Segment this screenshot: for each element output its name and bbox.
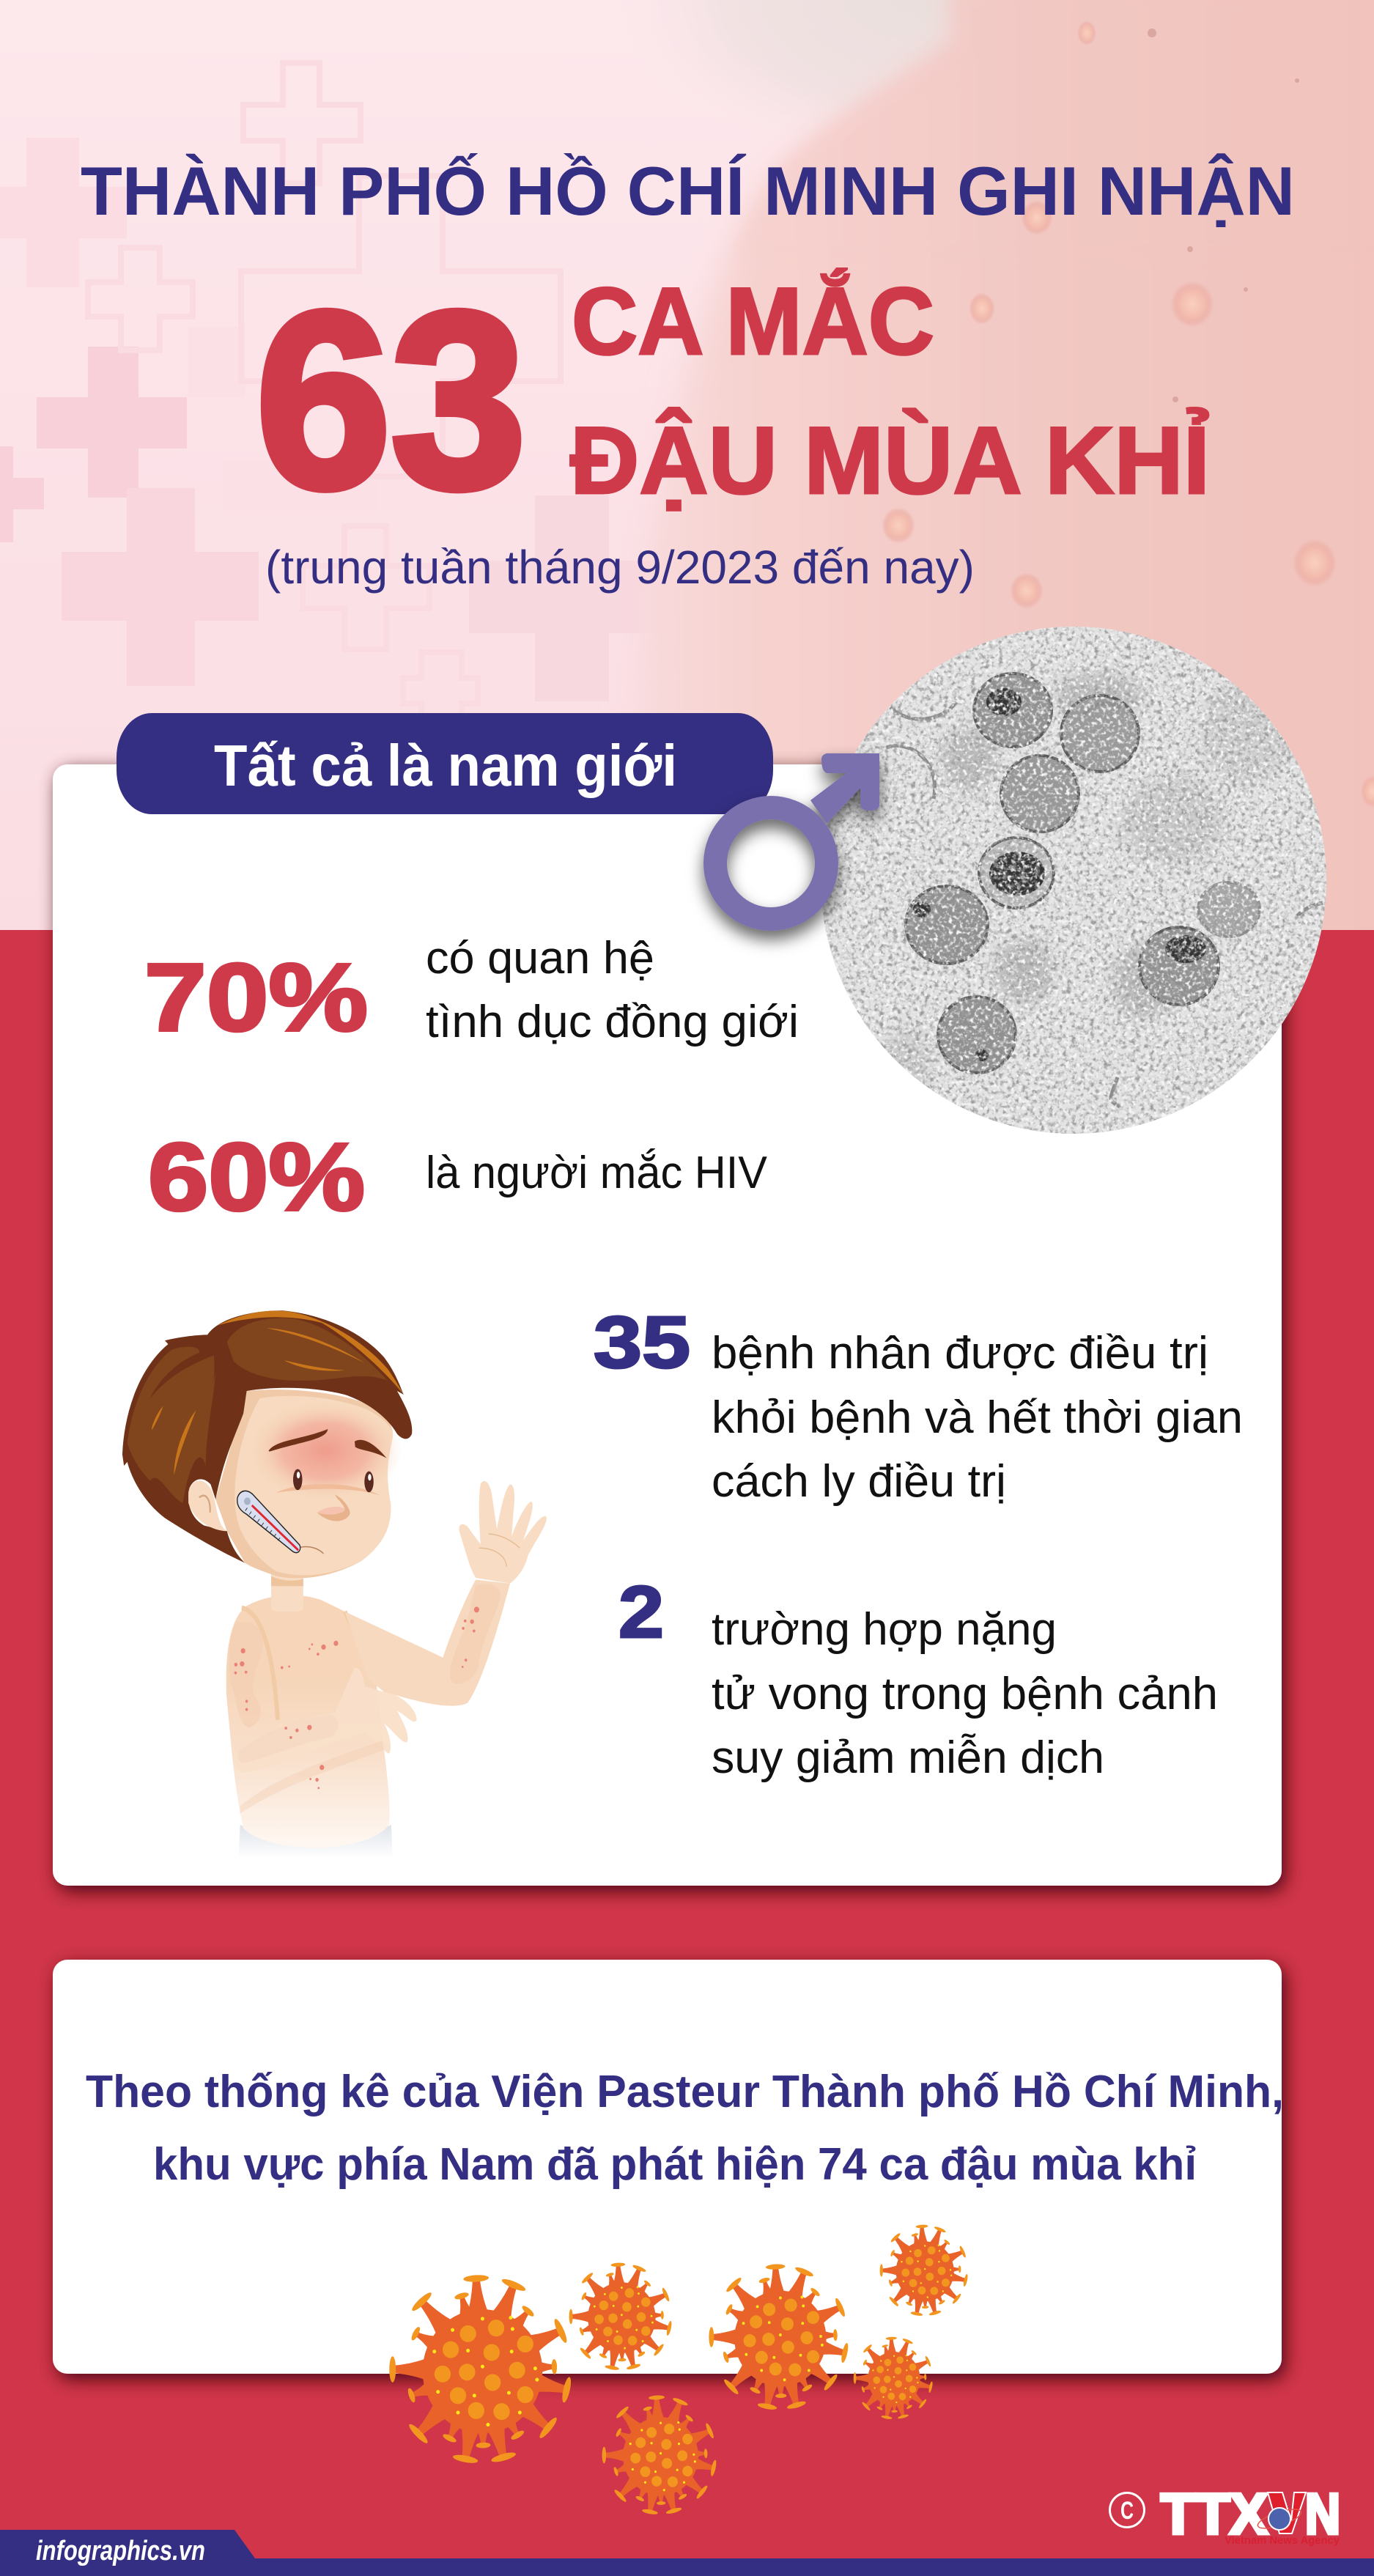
stat: 2 severe deaths: tử vong trong bệnh cảnh: [712, 1669, 1218, 1719]
logo: TTXVN copyright: [1109, 2481, 1340, 2547]
panel: main statistics: [53, 764, 1285, 1892]
stat: 2 severe deaths: [618, 1571, 1218, 1783]
stat: 70 percent: 70%: [144, 943, 368, 1051]
big number 63: 63: [256, 260, 526, 540]
icons: orange virus cluster: [389, 2224, 969, 2515]
title: line 1: THÀNH PHỐ HỒ CHÍ MINH GHI NHẬN: [81, 152, 1295, 229]
heading pill: all are male: Tất cả là nam giới: [214, 733, 677, 798]
stat: 2 severe deaths: 2: [618, 1571, 664, 1653]
logo: TTXVN copyright: Vietnam News Agency: [1225, 2534, 1340, 2547]
stat: 70 percent: có quan hệ: [426, 933, 654, 983]
stat: 2 severe deaths: suy giảm miễn dịch: [712, 1732, 1104, 1783]
logo: TTXVN copyright: C: [1120, 2497, 1134, 2525]
title: ĐẬU MÙA KHỈ: ĐẬU MÙA KHỈ: [570, 407, 1210, 514]
footer band with source: [0, 2530, 1374, 2576]
panel: Pasteur Institute note: Theo thống kê của Viện Pasteur Thành phố Hồ Chí Minh,: [86, 2067, 1284, 2117]
top header background with crosses and skin photo: [0, 0, 1374, 1018]
panel: Pasteur Institute note: [53, 1960, 1285, 2380]
stat: 70 percent: [144, 933, 799, 1051]
heading pill: all are male: [117, 713, 773, 814]
stat: 60 percent: [148, 1123, 768, 1230]
stat: 35 recovered patients: bệnh nhân được điều trị: [712, 1328, 1208, 1379]
stat: 60 percent: 60%: [148, 1123, 365, 1230]
stat: 35 recovered patients: khỏi bệnh và hết thời gian: [712, 1392, 1243, 1443]
stat: 70 percent: tình dục đồng giới: [426, 997, 799, 1047]
panel: Pasteur Institute note: khu vực phía Nam đã phát hiện 74 ca đậu mùa khỉ: [153, 2139, 1197, 2190]
logo: TTXVN copyright: TTX: [1161, 2481, 1268, 2546]
footer band with source: infographics.vn: [36, 2536, 205, 2566]
title: CA MẮC: CA MẮC: [572, 267, 934, 374]
stat: 35 recovered patients: [594, 1302, 1243, 1507]
subtitle date range: (trung tuần tháng 9/2023 đến nay): [265, 541, 975, 594]
stat: 2 severe deaths: trường hợp nặng: [712, 1604, 1057, 1655]
stat: 60 percent: là người mắc HIV: [426, 1148, 768, 1198]
icon: male symbol: [715, 753, 879, 919]
stat: 35 recovered patients: cách ly điều trị: [712, 1456, 1006, 1507]
illustration: sick boy with thermometer and rash: [122, 1310, 547, 1859]
stat: 35 recovered patients: 35: [594, 1302, 690, 1384]
logo: TTXVN copyright: N: [1305, 2481, 1340, 2546]
microscope image of virus particles: [813, 623, 1334, 1143]
